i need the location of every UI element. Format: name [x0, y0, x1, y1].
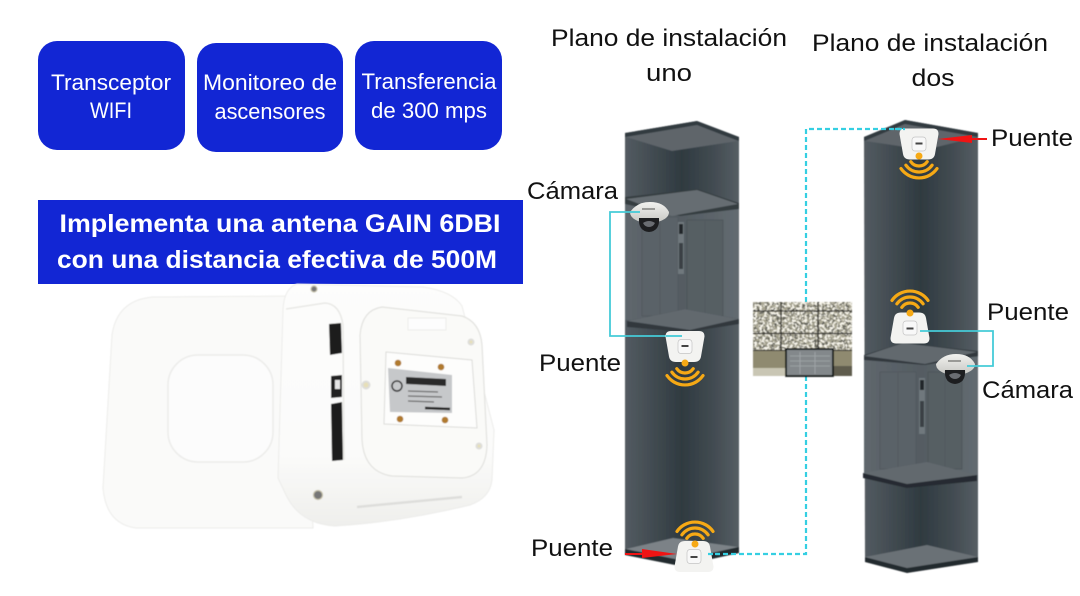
top rim and ceiling [625, 121, 739, 141]
red arrow: plan one, bottom [625, 549, 677, 558]
feature box: Transceptor WIFI: Transceptor [51, 70, 171, 95]
feature box: Transferencia de 300 mps [355, 41, 502, 150]
feature box: Monitoreo de ascensores: ascensores [214, 99, 326, 124]
middle landing floor [863, 473, 977, 488]
banner: antenna gain and range: con una distancia efectiva de 500M [57, 246, 497, 274]
laptop [786, 349, 833, 376]
label: Cámara, plan one: Cámara [527, 178, 618, 205]
wifi signal: plan two, top [901, 152, 937, 178]
clip [408, 318, 446, 330]
cab doors [642, 217, 723, 316]
label: Puente, plan one middle: Puente [539, 350, 621, 377]
heading: plan one: Plano de instalación [551, 25, 787, 52]
cab doors [880, 372, 962, 469]
vent slot [357, 497, 462, 507]
heading: plan one: uno [646, 60, 692, 87]
wifi signal: plan two, middle [892, 291, 928, 316]
bottom floor [865, 557, 978, 573]
label: Puente, plan two middle: Puente [987, 299, 1069, 326]
rear housing [278, 284, 494, 526]
black ports [329, 323, 342, 355]
elevator cab [864, 357, 978, 475]
housing recess edge [286, 303, 344, 460]
feature box: Transferencia de 300 mps: Transferencia [362, 69, 497, 94]
feature box: Monitoreo de ascensores [197, 43, 343, 152]
dashed link end at top bridge [895, 128, 905, 130]
bridge: plan one, bottom [674, 541, 714, 572]
heading: plan two: dos [912, 65, 954, 92]
bridge: plan one, middle [666, 331, 704, 362]
wifi signal: plan one, bottom [677, 522, 713, 548]
feature box: Monitoreo de ascensores: Monitoreo de [203, 70, 337, 95]
feature box: Transceptor WIFI: WIFI [90, 98, 132, 123]
product photo: access point front cover and rear plate [103, 284, 494, 528]
dashed link end at bottom bridge [708, 553, 720, 555]
banner: antenna gain and range: Implementa una antena GAIN 6DBI [60, 210, 500, 238]
middle landing floor [627, 309, 739, 332]
solid link: camera to bridge, plan one [610, 212, 682, 336]
upper landing floor [864, 343, 978, 365]
control room monitor wall [753, 302, 852, 376]
wifi signal: plan one, middle [667, 360, 703, 385]
rating sticker [388, 368, 452, 413]
bridge: plan two, middle [890, 312, 930, 344]
camera: plan two [936, 354, 975, 384]
front cover inner square [168, 355, 273, 462]
label: Puente, plan one bottom: Puente [531, 535, 613, 562]
feature box: Transceptor WIFI [38, 41, 185, 150]
brass inserts and screws [395, 360, 448, 423]
floor strip [753, 351, 852, 376]
heading: plan two [812, 30, 1048, 92]
mounting plate centre [384, 352, 477, 428]
camera: plan one [630, 202, 669, 232]
front cover [103, 296, 313, 528]
top rim and ceiling [864, 120, 978, 141]
label: Puente, plan two top: Puente [991, 125, 1073, 152]
elevator shaft: plan one [625, 121, 739, 566]
heading: plan two: Plano de instalación [812, 30, 1048, 57]
shaft body [864, 120, 978, 572]
bottom floor [625, 547, 739, 566]
elevator shaft: plan two [863, 120, 978, 573]
solid link: camera to bridge, plan two [920, 331, 993, 366]
label: Cámara, plan two: Cámara [982, 377, 1073, 404]
upper landing floor [625, 189, 739, 216]
red arrow: plan two, top [938, 135, 987, 143]
banner: antenna gain and range [38, 200, 523, 284]
heading: plan one [551, 25, 787, 87]
bridge: plan two, top [900, 128, 938, 160]
feature box: Transferencia de 300 mps: de 300 mps [371, 98, 487, 123]
elevator cab [625, 203, 739, 320]
shaft body [625, 121, 739, 565]
dashed data link between shafts [708, 129, 905, 554]
mounting plate [360, 307, 487, 478]
